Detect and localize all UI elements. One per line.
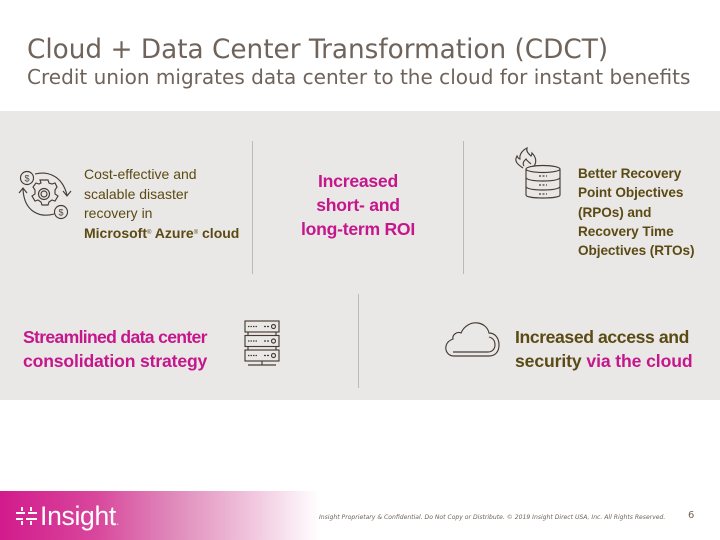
icon: cloud (445, 322, 500, 357)
divider (252, 141, 253, 274)
footer band (0, 491, 320, 540)
text: consolidation: Streamlined data center (23, 327, 207, 347)
title: Cloud + Data Center Transformation (CDCT) (27, 35, 608, 65)
footer legal text: Insight Proprietary & Confidential. Do Not Copy or Distribute. © 2019 Insight Direct USA, Inc. All Rights Reserved. (319, 514, 665, 521)
text: ROI: short- and (316, 195, 400, 215)
text: ROI: Increased (318, 171, 398, 191)
panel: benefits (0, 111, 720, 400)
text: access and security (515, 327, 692, 371)
text: consolidation (23, 327, 208, 371)
logo: Insight (16, 501, 119, 531)
icon: cost gear cycle: $ (58, 208, 64, 218)
divider (463, 141, 464, 274)
text: recovery objectives: Point Objectives (578, 185, 683, 200)
icon: database with flame (515, 146, 561, 199)
text: recovery objectives: Objectives (RTOs) (578, 243, 694, 258)
text: disaster recovery (84, 166, 239, 240)
text: recovery objectives: Recovery Time (578, 224, 674, 239)
text: consolidation: consolidation strategy (23, 351, 207, 371)
text: disaster recovery: Microsoft® Azure® cloud (84, 224, 239, 240)
text: recovery objectives: (RPOs) and (578, 205, 651, 220)
icon: server rack (244, 320, 280, 366)
icon: cost gear cycle: $ (24, 174, 30, 184)
text: recovery objectives: Better Recovery (578, 166, 681, 181)
text: recovery objectives (578, 166, 694, 258)
text: disaster recovery: scalable disaster (84, 186, 188, 202)
logo wordmark: Insight. (40, 501, 119, 531)
text: ROI (301, 171, 415, 239)
subtitle: Credit union migrates data center to the cloud for instant benefits (27, 65, 690, 89)
text: ROI: long-term ROI (301, 219, 415, 239)
icon: cost gear cycle (18, 170, 72, 220)
divider (358, 294, 359, 388)
page number: 6 (688, 510, 694, 521)
logo mark (16, 507, 37, 525)
text: disaster recovery: recovery in (84, 205, 152, 221)
text: access and security: Increased access and (515, 327, 689, 347)
text: access and security: security via the cloud (515, 351, 692, 371)
text: disaster recovery: Cost-effective and (84, 166, 197, 182)
